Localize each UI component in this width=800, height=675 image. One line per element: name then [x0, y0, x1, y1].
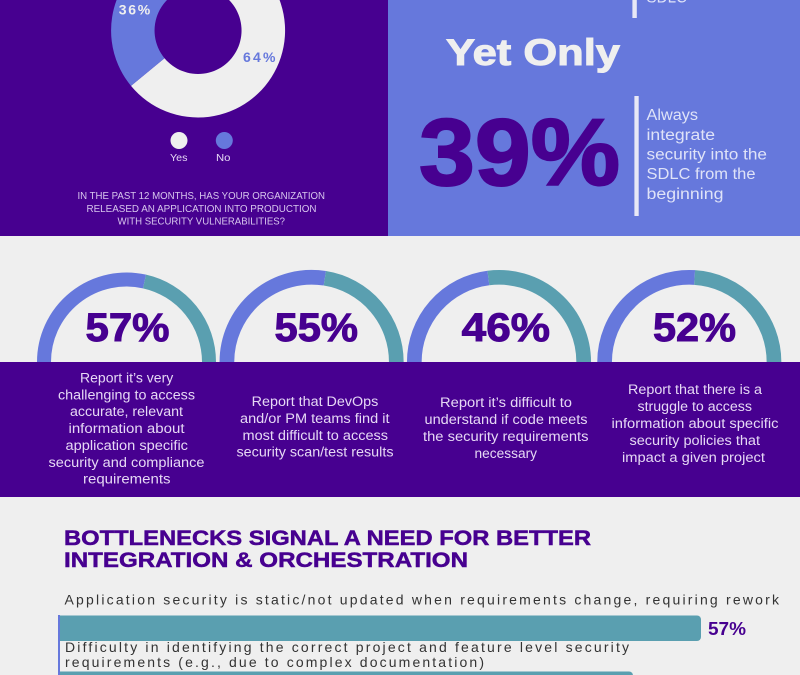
survey question caption	[78, 191, 325, 228]
statement: 57 percent: Report it’s very	[80, 370, 174, 386]
statement: 55 percent: and/or PM teams find it	[240, 411, 390, 426]
statement: 55 percent	[236, 394, 394, 460]
bar chart: bottlenecks	[58, 592, 780, 675]
panel: vulnerabilities released survey	[0, 0, 388, 236]
gauge percentages: 46%	[462, 306, 550, 350]
gauge: 55 percent	[227, 277, 396, 362]
statement: 52 percent: Report that there is a	[628, 382, 763, 397]
survey question caption: IN THE PAST 12 MONTHS, HAS YOUR ORGANIZATION	[78, 191, 325, 202]
statement: 46 percent: necessary	[474, 446, 537, 461]
gauge percentages: 57%	[86, 306, 170, 350]
statement: 46 percent: Report it’s difficult to	[440, 395, 572, 410]
statement: 57 percent: information about	[68, 421, 185, 436]
statement: 52 percent: impact a given project	[622, 450, 765, 465]
statement text: beginning	[646, 186, 724, 203]
heading: bottlenecks: BOTTLENECKS SIGNAL A NEED FOR BETTER	[64, 527, 591, 550]
statement: 52 percent: security policies that	[630, 433, 760, 448]
statement: 55 percent: Report that DevOps	[252, 394, 379, 409]
legend: Yes	[170, 152, 188, 164]
bar value: 57 percent: 57%	[708, 619, 746, 639]
statement: 52 percent: struggle to access	[638, 399, 752, 414]
gauge percentages: 52%	[653, 306, 736, 350]
bar label: difficulty identifying requirements: requirements (e.g., due to complex documentation)	[65, 654, 484, 670]
statement text: security into the	[646, 146, 767, 164]
gauge: 52 percent	[605, 277, 774, 362]
statement: 52 percent	[612, 382, 779, 465]
legend	[170, 132, 233, 164]
divider bar	[634, 96, 639, 216]
statement: 57 percent: security and compliance	[48, 455, 204, 470]
bar label: static security: Application security is static/not updated when requirements change, requiring rework	[64, 592, 780, 608]
chart axis	[58, 615, 60, 675]
statement: 57 percent: application specific	[66, 438, 188, 453]
legend: No	[216, 152, 231, 164]
statement: 46 percent: the security requirements	[423, 429, 589, 444]
donut chart: 36%	[119, 2, 151, 18]
statement: 55 percent: security scan/test results	[236, 444, 394, 460]
statement: 46 percent: understand if code meets	[424, 412, 588, 427]
bar: second, cropped	[60, 672, 633, 675]
statement: 55 percent: most difficult to access	[242, 428, 388, 443]
statement text: Always	[646, 107, 698, 124]
bar label: difficulty identifying requirements	[65, 639, 629, 670]
bar label: difficulty identifying requirements: Difficulty in identifying the correct project and feature level security	[65, 639, 629, 655]
heading: yet only: Yet Only	[446, 32, 620, 73]
gauge percentages	[86, 306, 736, 350]
statement text	[646, 107, 767, 203]
clipped previous statistic	[632, 0, 687, 18]
panel: yet only 39 percent	[388, 0, 800, 236]
panel: report statements band	[0, 362, 800, 497]
gauge percentages: 55%	[274, 306, 358, 350]
donut chart	[111, 0, 285, 117]
statement: 57 percent: requirements	[83, 472, 171, 486]
survey question caption: WITH SECURITY VULNERABILITIES?	[118, 216, 285, 228]
heading: bottlenecks: INTEGRATION & ORCHESTRATION	[64, 549, 468, 572]
gauge: 57 percent	[44, 280, 209, 362]
statement: 46 percent	[423, 395, 589, 461]
survey question caption: RELEASED AN APPLICATION INTO PRODUCTION	[86, 204, 316, 215]
heading: bottlenecks	[64, 527, 591, 572]
statement: 57 percent: challenging to access	[58, 387, 195, 402]
statement: 57 percent	[48, 370, 204, 486]
statement text: SDLC from the	[646, 166, 756, 183]
statement: 57 percent: accurate, relevant	[70, 404, 183, 419]
gauge: 46 percent	[414, 277, 584, 362]
big number: 39 percent: 39%	[419, 100, 620, 206]
bar: 57 percent	[60, 616, 701, 641]
statement: 52 percent: information about specific	[612, 416, 779, 431]
statement text: integrate	[646, 127, 715, 144]
donut chart: 64%	[243, 49, 276, 65]
